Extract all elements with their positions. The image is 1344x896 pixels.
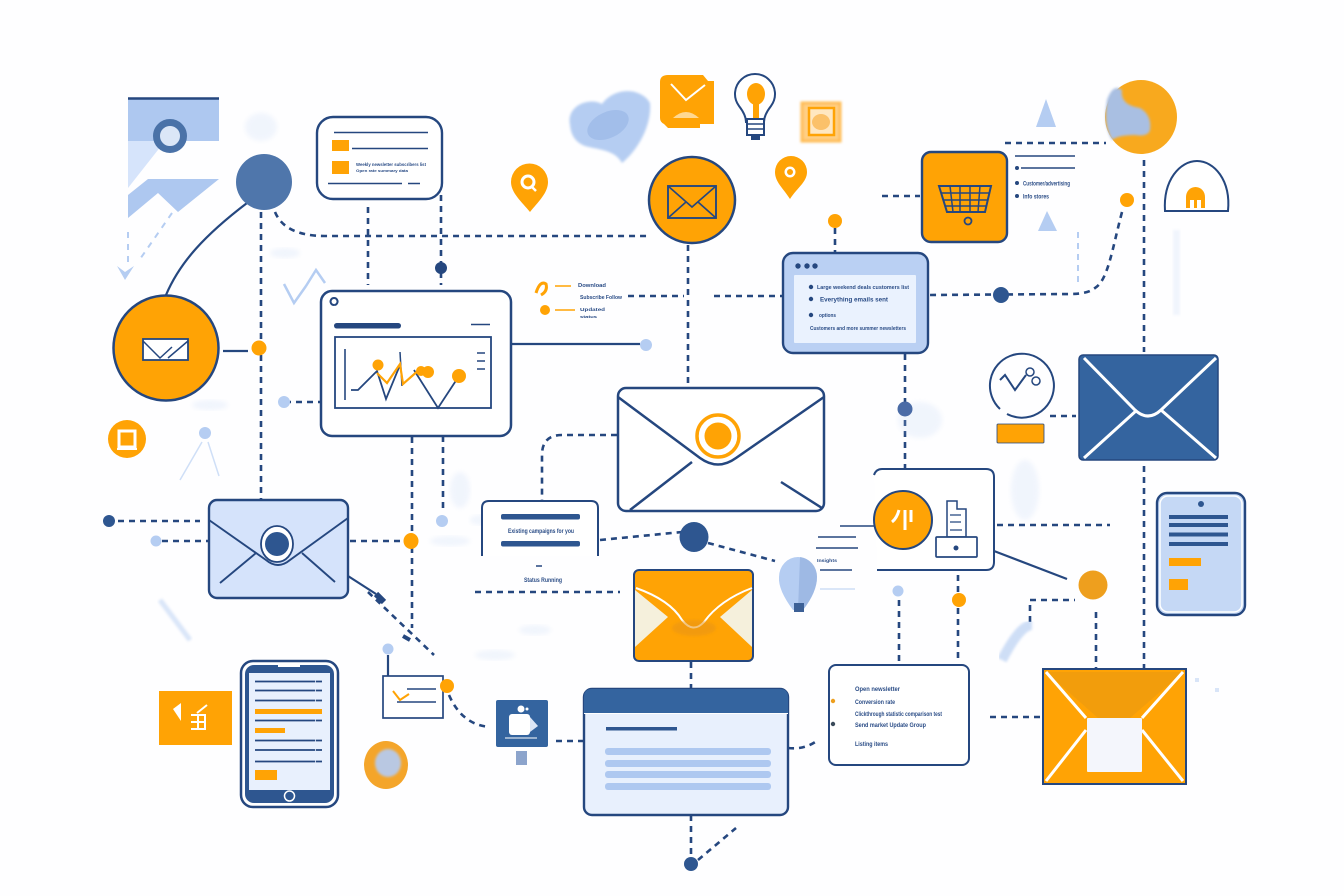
legend: small labels: Download (578, 283, 606, 289)
dot: navy center (680, 522, 708, 552)
card: text summary (317, 117, 442, 199)
node: blue circle (236, 154, 292, 210)
icon: orange seal (697, 415, 739, 457)
panel: browser window: Large weekend deals customers list (817, 285, 909, 291)
node: orange mail circle (114, 296, 218, 400)
legend: small labels: status (580, 314, 598, 319)
icon: light blue speech heart (570, 91, 650, 163)
icon: light triangle top (1036, 99, 1056, 127)
envelope: solid orange (634, 570, 753, 661)
icon: faint chevron (284, 270, 325, 303)
tablet: right (1157, 493, 1245, 615)
panel: print status (816, 469, 994, 589)
node: orange envelope circle (649, 157, 735, 243)
envelope: large orange (1043, 669, 1186, 784)
dot: orange left (252, 340, 266, 356)
icon: small envelope (143, 339, 188, 360)
panel: browser window: Customers and more summer newsletters (810, 326, 906, 332)
dot: orange right (1120, 193, 1134, 207)
card: check list (383, 676, 443, 718)
legend: small labels: Subscribe Follow (580, 295, 622, 301)
card: bottom list (829, 665, 969, 765)
pin: orange location (775, 156, 807, 199)
envelope: light blue (209, 500, 348, 598)
envelope: large outline (618, 388, 824, 511)
icon: light triangle bottom (1038, 211, 1057, 231)
node: speckled orange dot (1078, 570, 1108, 600)
list: cart details: Info stores (1023, 194, 1050, 200)
panel: browser window (783, 253, 928, 353)
illustration: picture card top left (128, 98, 219, 218)
icon: orange chat badge (108, 420, 146, 458)
phone (241, 661, 338, 807)
panel: analytics chart (321, 291, 511, 436)
icon: orange circle badge (874, 491, 932, 549)
icon: orange graph tile (159, 691, 232, 745)
card: text summary: Open rate summary data (356, 168, 409, 173)
card: campaign summary: Existing campaigns for you (508, 528, 574, 535)
dot: navy bottom (684, 857, 698, 871)
pin: orange search (511, 164, 548, 212)
list: cart details: Customer/advertising (1023, 180, 1070, 188)
faint background marks (160, 113, 1219, 764)
panel: print status: Insights (817, 558, 838, 563)
list: cart details (1015, 156, 1075, 200)
dot: orange above browser (828, 214, 842, 228)
window: newsletter (584, 689, 788, 815)
icon: light bulb (735, 74, 775, 140)
dot: light blue chart link (278, 396, 290, 408)
icon: blue video tile (496, 700, 548, 765)
node: speckled orange blob (1105, 80, 1177, 154)
dot: orange mid left (404, 533, 418, 549)
card: campaign summary: Status Running (524, 578, 562, 584)
tile: shopping cart (922, 152, 1007, 242)
chart lines (345, 349, 485, 408)
icon: scattered speck bullets (376, 594, 410, 640)
icon: sketchy orange frame (802, 103, 840, 141)
card: bottom list: Send market Update Group (855, 723, 926, 729)
icon: orange envelope tile (660, 75, 714, 128)
dot: light blue right of chart (640, 339, 652, 351)
legend: small labels: Updated (580, 307, 605, 312)
dot: light far left (150, 536, 162, 546)
icon: progress gauge (990, 354, 1054, 443)
card: text summary: Weekly newsletter subscribers list (356, 162, 426, 167)
panel: browser window: Everything emails sent (820, 298, 888, 304)
dot: light above check card (382, 644, 394, 654)
legend: small labels (536, 283, 622, 319)
dot: speckled blue (898, 402, 912, 416)
dot: orange near check card (440, 679, 454, 693)
icon: printer (936, 501, 977, 557)
card: bottom list: Listing items (855, 742, 889, 748)
node: speckled orange blue blob (364, 741, 408, 789)
card: bottom list: Conversion rate (855, 700, 896, 706)
dot: navy far left (103, 515, 115, 527)
dot: navy (435, 262, 447, 274)
dot: orange below panel (952, 593, 966, 607)
panel: browser window: options (819, 313, 836, 319)
card: bottom list: Clickthrough statistic comparison test (855, 712, 942, 718)
dot: navy on link (993, 287, 1009, 303)
dot: light blue mid (436, 515, 448, 527)
connector lines (118, 143, 1144, 860)
arrow: faint dashed arrow down (117, 213, 172, 280)
dot: light blue below panel (892, 586, 904, 596)
envelope: solid blue (1079, 355, 1218, 460)
faint tripod marks (180, 427, 219, 480)
card: bottom list: Open newsletter (855, 687, 901, 693)
icon: cart (939, 186, 991, 224)
card: campaign summary (482, 501, 598, 584)
icon: arch dome (1165, 161, 1228, 211)
icon: light balloon bulb (779, 557, 817, 612)
